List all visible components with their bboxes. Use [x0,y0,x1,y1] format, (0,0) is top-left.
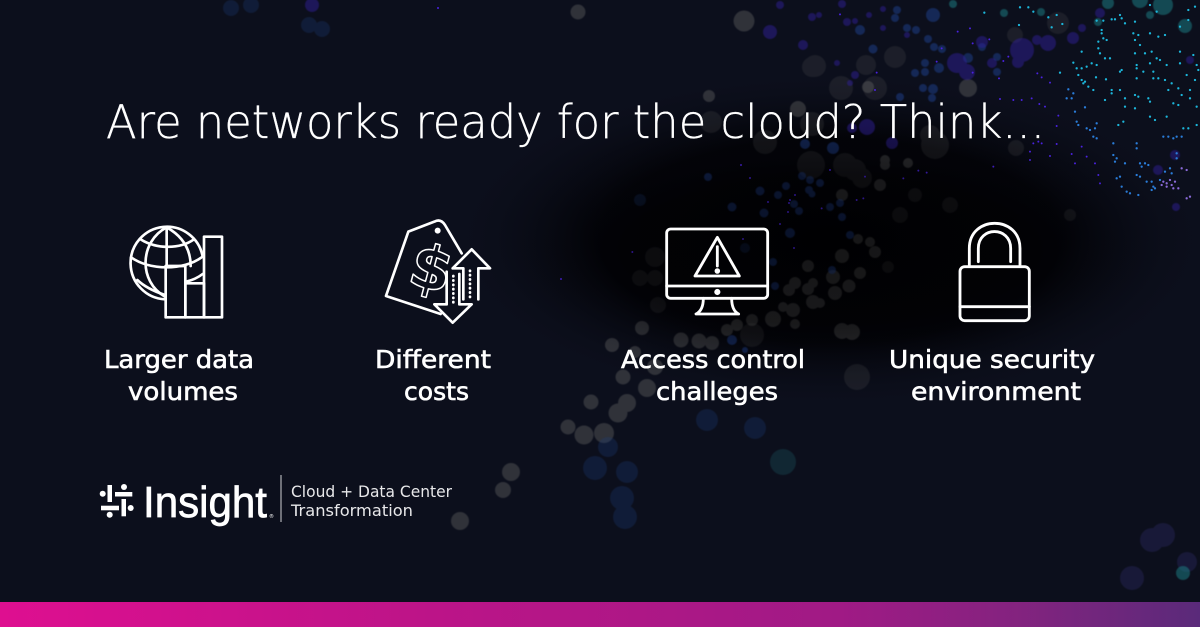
label: unique security environment [889,345,1095,406]
icon: price tag with dollar and arrows [386,221,490,323]
label: access control challeges [621,345,805,406]
label: larger data volumes: volumes [128,377,238,406]
label: different costs [375,345,491,406]
label: unique security environment: environment [911,377,1081,406]
logo: Insight: ® [269,513,274,520]
icon: padlock [960,223,1029,321]
icon: Insight logo mark [100,484,134,518]
label: access control challeges: Access control [621,345,805,374]
icon: monitor with warning triangle [667,229,768,314]
icon: globe with bar chart [131,227,222,317]
logo: Insight [100,475,452,527]
icon: price tag with dollar and arrows: $ [402,230,460,308]
bottom gradient bar [0,602,1200,627]
bokeh particle field [223,0,1198,590]
label: access control challeges: challeges [656,377,778,406]
title: Are networks ready for the cloud? Think... [106,95,1045,149]
logo: Insight: Cloud + Data Center [291,482,452,501]
logo: Insight: Insight [143,478,267,527]
cyan and violet point dots [438,5,1198,279]
label: larger data volumes [104,345,254,406]
label: different costs: costs [404,377,469,406]
label: larger data volumes: Larger data [104,345,254,374]
label: unique security environment: Unique security [889,345,1095,374]
logo: Insight: Transformation [290,501,413,520]
label: different costs: Different [375,345,491,374]
